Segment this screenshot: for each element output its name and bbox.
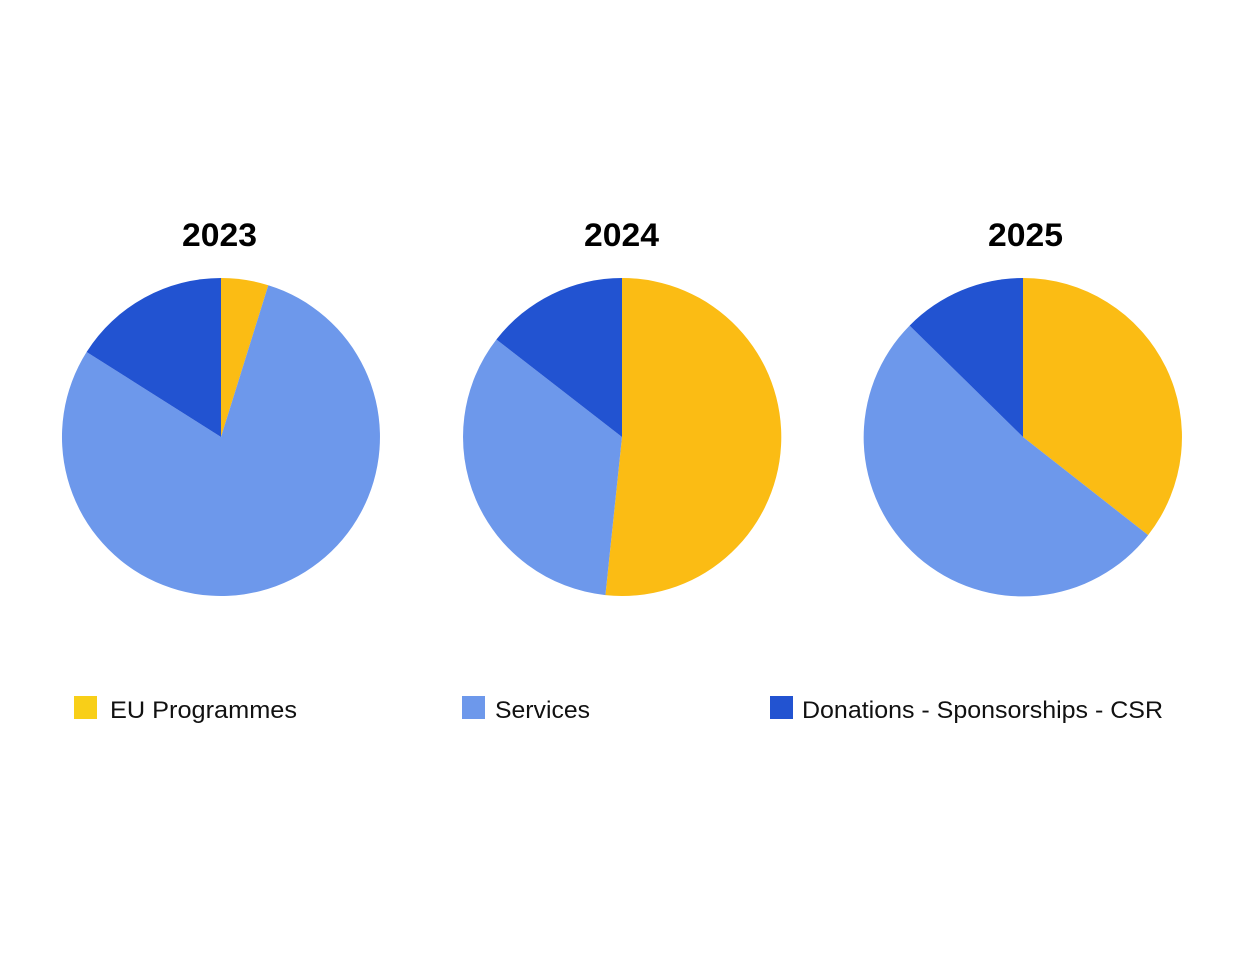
pie chart 2023	[62, 278, 380, 596]
legend: Donations - Sponsorships - CSR: Donations - Sponsorships - CSR	[802, 697, 1163, 724]
pie chart 2024	[463, 278, 781, 596]
title: 2024: 2024	[584, 217, 659, 253]
legend: Services: Services	[495, 697, 590, 724]
title: 2025: 2025	[988, 217, 1063, 253]
title: 2023: 2023	[182, 217, 257, 253]
legend: Services	[462, 696, 590, 724]
pie chart 2025	[864, 278, 1182, 596]
legend: EU Programmes: EU Programmes	[110, 697, 297, 724]
